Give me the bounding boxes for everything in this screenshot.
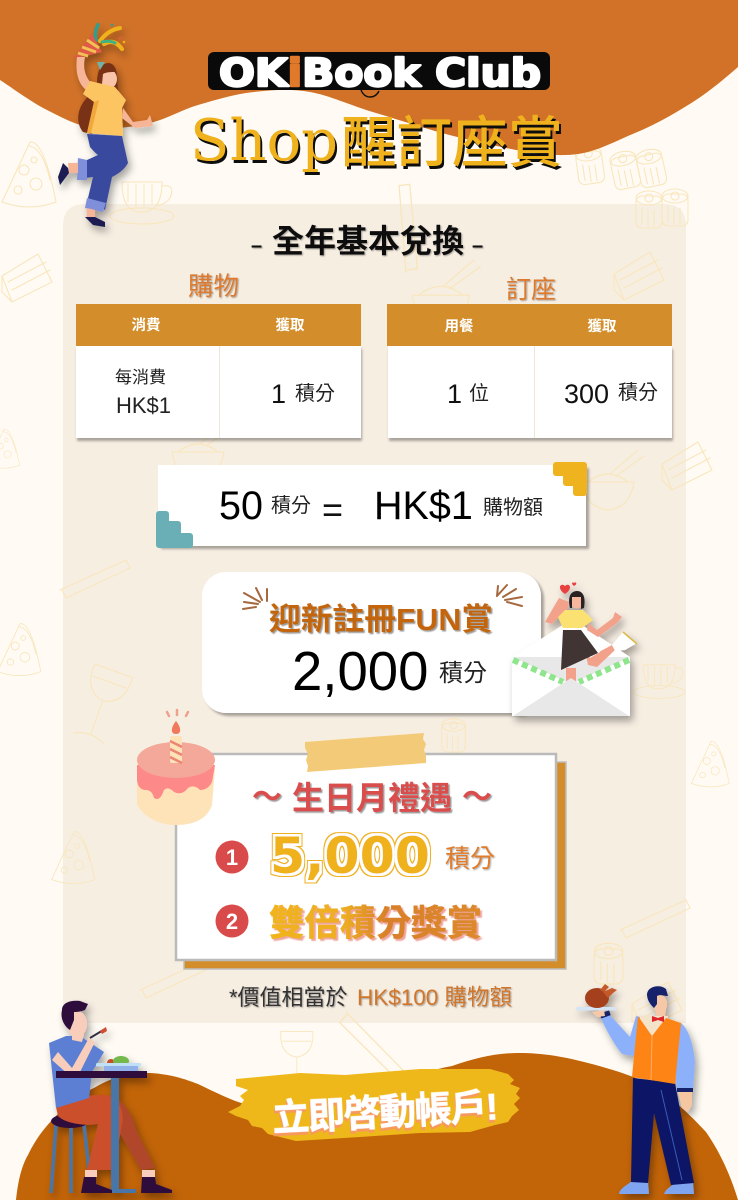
right sleeve [672,1022,695,1092]
bow tie [652,1016,664,1022]
arm right [122,108,153,128]
card back [184,762,566,969]
card: birthday [176,733,566,969]
table top [56,1071,147,1078]
panel: main beige panel [63,204,686,1023]
section heading: 全年基本兌換 [272,223,464,259]
title: 醒訂座賞 [341,112,563,174]
number two [216,904,248,938]
call to action: brush banner: 立即啓動帳戶! [271,1086,499,1139]
heading: booking: 訂座 [506,276,556,304]
vest [632,1016,681,1084]
bottom orange wave [16,1053,738,1200]
table: shopping: 積分 [295,382,335,405]
table: booking: 1 [447,379,462,409]
food doodle pattern [0,142,729,1095]
envelope stripes [513,660,629,682]
figure: man eating at table [49,1001,172,1193]
heading: shopping: 購物 [188,273,239,301]
card: points conversion: = [322,489,343,530]
tape [305,733,426,772]
plate of food [96,1056,141,1071]
hearts [560,585,570,594]
rays [243,585,522,609]
figure: woman with party popper [58,23,153,227]
raised leg [586,645,615,667]
top [558,610,593,628]
arms [545,598,569,624]
jeans [85,134,128,210]
card: birthday: 生日月禮遇 [292,780,452,816]
shirt [83,81,126,136]
stool [51,1114,89,1193]
icon: envelope with girl [512,582,637,716]
envelope bottom flap [513,678,629,716]
corner: yellow [556,465,584,493]
candle [170,736,182,763]
title [190,108,563,174]
section heading: – [472,235,483,257]
envelope back flap [512,625,630,657]
title: Shop [190,108,338,174]
table: shopping: 1 [271,379,286,409]
card: new member bonus: 積分 [439,660,487,687]
lower leg [566,668,576,684]
card: birthday: 積分 [445,845,495,873]
skirt [561,630,598,670]
number two: 2 [226,909,238,934]
hair back [78,63,120,134]
footnote: HK$100 購物額 [357,985,512,1010]
value 5,000: 5,000 [270,827,430,885]
table: shopping [76,304,361,438]
shirt collar [640,1016,668,1040]
shirt [49,1036,104,1108]
shoes [81,1177,112,1193]
table: booking: 位 [469,382,489,405]
call to action: brush banner [228,1069,520,1141]
footnote [229,985,512,1010]
head [653,1002,667,1016]
card: birthday: ～ [462,781,492,814]
section heading: – [251,235,262,257]
hand [678,1092,692,1112]
logo: OKiBook Club [219,51,541,95]
card: points conversion [158,465,586,546]
card: birthday: ～ [252,781,282,814]
table: shopping: 每消費 [115,368,166,387]
table: booking: 用餐 [444,317,474,335]
table: booking: 積分 [618,381,658,404]
card: points conversion: 50 [219,484,263,528]
head [570,594,584,608]
icon: birthday cake [137,710,215,825]
table: shopping: 消費 [132,316,160,334]
number one [216,840,248,874]
arm up [76,57,90,90]
head [101,70,117,88]
arm [52,1038,95,1076]
card: new member bonus [202,572,541,713]
top orange wave [0,0,738,155]
shoes [619,1181,649,1194]
popper [73,23,125,59]
table leg [111,1078,119,1190]
fork [90,1029,105,1038]
card: points conversion: 積分 [271,494,311,517]
table: booking: 300 [564,379,609,409]
party hat [97,62,105,70]
card: new member bonus: 2,000 [292,641,428,702]
figure: waiter with roast chicken [576,984,695,1194]
head [72,1030,84,1042]
hand under plate [592,1010,605,1017]
roast chicken [585,984,617,1008]
card: points conversion: HK$1 [374,484,473,528]
card: new member bonus: 迎新註冊FUN賞 [269,602,493,637]
table: shopping: HK$1 [116,393,171,418]
plate [576,1007,616,1010]
table: shopping: 獲取 [276,317,305,334]
card: points conversion: 購物額 [483,496,543,519]
footnote: *價值相當於 [229,985,348,1010]
corner: teal [159,514,190,545]
envelope inside [512,657,630,697]
number one: 1 [226,845,238,870]
shoes [68,163,78,173]
left sleeve [601,1014,640,1056]
table: booking: 獲取 [588,318,617,335]
pants [631,1078,694,1185]
cuffs [77,158,87,180]
pants [100,1095,155,1170]
envelope front [512,657,630,716]
shoe [612,632,637,651]
card: birthday: 雙倍積分獎賞 [269,903,482,943]
table: booking [387,304,672,438]
